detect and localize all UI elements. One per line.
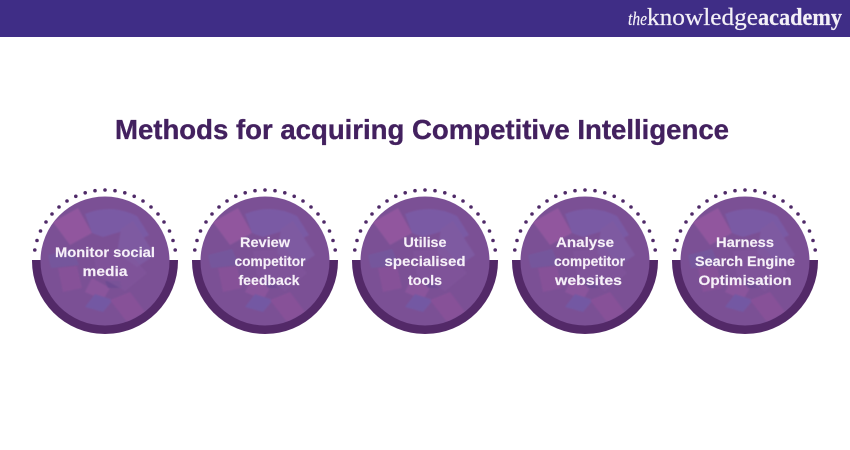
badge: Review competitor feedback: competitor	[234, 253, 306, 269]
badge: Utilise specialised tools: specialised	[384, 253, 466, 269]
badge: Review competitor feedback: feedback	[238, 272, 300, 288]
badge: Review competitor feedback	[192, 188, 338, 334]
logo: the knowledge academy: the	[628, 9, 647, 30]
badge: Monitor social media	[32, 188, 178, 334]
badge: Harness Search Engine Optimisation: Harness	[716, 234, 774, 250]
badge: Review competitor feedback: Review	[240, 234, 290, 250]
badge: Analyse competitor websites: Analyse	[556, 234, 614, 250]
badge: Analyse competitor websites	[512, 188, 658, 334]
badge: Harness Search Engine Optimisation: Search Engine	[695, 253, 795, 269]
logo: the knowledge academy: academy	[758, 4, 843, 31]
badge: Analyse competitor websites: competitor	[554, 253, 626, 269]
badge: Monitor social media: media	[82, 263, 128, 279]
badge: Utilise specialised tools: Utilise	[404, 234, 447, 250]
title: Methods for acquiring Competitive Intelligence	[115, 114, 729, 145]
badge: Harness Search Engine Optimisation	[672, 188, 818, 334]
badge: Utilise specialised tools: tools	[408, 272, 442, 288]
badge: Monitor social media: Monitor social	[55, 244, 155, 260]
header bar	[0, 0, 850, 37]
badge: Utilise specialised tools	[352, 188, 498, 334]
logo: the knowledge academy: knowledge	[647, 4, 758, 31]
logo: the knowledge academy	[628, 4, 843, 31]
badge: Analyse competitor websites: websites	[554, 272, 622, 288]
badge: Harness Search Engine Optimisation: Optimisation	[698, 272, 792, 288]
